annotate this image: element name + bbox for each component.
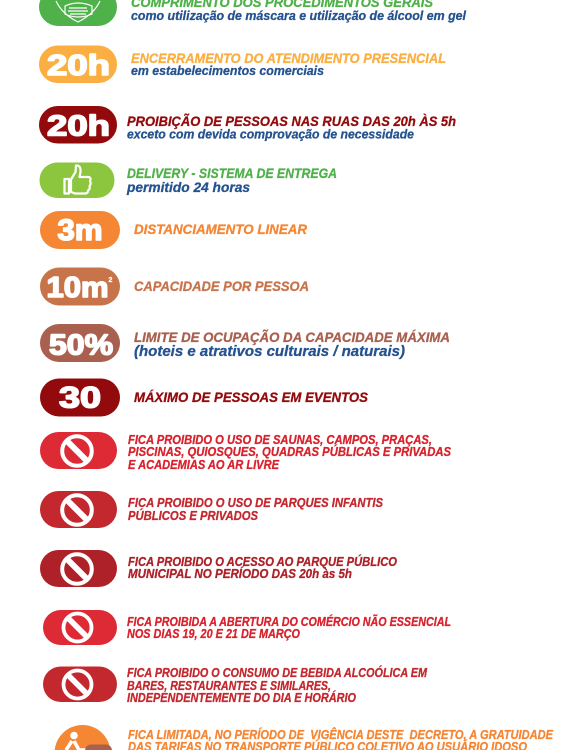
icon: 30 pill: 30: [59, 382, 101, 414]
icon: elderly person circle: [54, 725, 112, 750]
icon: dark red 20h pill: 20h: [47, 110, 110, 142]
text: non-essential commerce: NOS DIAS 19, 20 E 21 DE MARÇO: [127, 627, 300, 641]
text: saunas and courts: PISCINAS, QUIOSQUES, QUADRAS PÚBLICAS E PRIVADAS: [128, 444, 452, 459]
icon: 10m2 pill: [40, 268, 120, 306]
icon: 3m pill: [40, 211, 120, 249]
text: municipal park: [128, 554, 397, 581]
text: closing of in-person service: ENCERRAMENTO DO ATENDIMENTO PRESENCIAL: [131, 50, 446, 66]
text: linear distancing: DISTANCIAMENTO LINEAR: [134, 221, 308, 237]
text: closing of in-person service: [131, 50, 446, 78]
text: municipal park: MUNICIPAL NO PERÍODO DAS 20h às 5h: [128, 566, 352, 581]
text: general procedures: como utilização de máscara e utilização de álcool em gel: [131, 8, 466, 23]
icon: delivery thumbs up pill: [40, 162, 114, 198]
text: alcohol consumption: FICA PROIBIDO O CONSUMO DE BEBIDA ALCOÓLICA EM: [127, 665, 428, 680]
icon: 10m2 pill: 10m: [46, 272, 108, 304]
text: saunas and courts: [128, 433, 452, 472]
icon: 50% pill: [40, 324, 120, 362]
text: delivery: permitido 24 horas: [126, 179, 250, 195]
text: saunas and courts: FICA PROIBIDO O USO DE SAUNAS, CAMPOS, PRAÇAS,: [128, 433, 432, 447]
text: delivery: DELIVERY - SISTEMA DE ENTREGA: [127, 165, 337, 181]
text: free transport limitation: [128, 727, 554, 750]
icon: prohibited pill 1: [40, 432, 117, 469]
icon: orange 20h pill: 20h: [47, 50, 110, 82]
text: street prohibition: PROIBIÇÃO DE PESSOAS NAS RUAS DAS 20h ÀS 5h: [127, 112, 456, 129]
text: street prohibition: [127, 112, 456, 142]
text: playgrounds: PÚBLICOS E PRIVADOS: [128, 508, 259, 523]
icon: orange 20h pill: [39, 46, 117, 83]
text: delivery: [126, 165, 337, 195]
text: capacity per person: CAPACIDADE POR PESSOA: [134, 278, 309, 294]
text: alcohol consumption: BARES, RESTAURANTES E SIMILARES,: [127, 679, 331, 693]
text: closing of in-person service: em estabelecimentos comerciais: [131, 63, 324, 78]
icon: prohibited pill 5: [43, 666, 117, 702]
text: occupancy limit: LIMITE DE OCUPAÇÃO DA CAPACIDADE MÁXIMA: [134, 328, 450, 345]
icon: 10m2 pill: 2: [109, 277, 113, 284]
text: non-essential commerce: FICA PROIBIDA A ABERTURA DO COMÉRCIO NÃO ESSENCIAL: [127, 614, 451, 629]
text: general procedures: [131, 0, 466, 23]
icon: 3m pill: 3m: [58, 214, 102, 247]
icon: 30 pill: [40, 378, 120, 416]
text: saunas and courts: E ACADEMIAS AO AR LIVRE: [128, 458, 280, 472]
text: occupancy limit: (hoteis e atrativos culturais / naturais): [134, 343, 405, 360]
text: occupancy limit: [134, 328, 450, 360]
text: alcohol consumption: [127, 665, 428, 705]
icon: prohibited pill 3: [40, 550, 117, 587]
text: non-essential commerce: [127, 614, 451, 641]
icon: 50% pill: 50%: [49, 330, 113, 362]
icon: prohibited pill 4: [43, 610, 117, 645]
icon: green mask pill: [39, 0, 117, 26]
text: street prohibition: exceto com devida comprovação de necessidade: [127, 126, 414, 142]
text: playgrounds: [128, 496, 384, 523]
icon: dark red 20h pill: [39, 106, 117, 144]
text: maximum people at events: MÁXIMO DE PESSOAS EM EVENTOS: [134, 389, 369, 405]
text: alcohol consumption: INDEPENDENTEMENTE DO DIA E HORÁRIO: [127, 690, 356, 705]
text: municipal park: FICA PROIBIDO O ACESSO AO PARQUE PÚBLICO: [128, 554, 397, 569]
text: playgrounds: FICA PROIBIDO O USO DE PARQUES INFANTIS: [128, 496, 384, 510]
icon: prohibited pill 2: [40, 491, 117, 528]
